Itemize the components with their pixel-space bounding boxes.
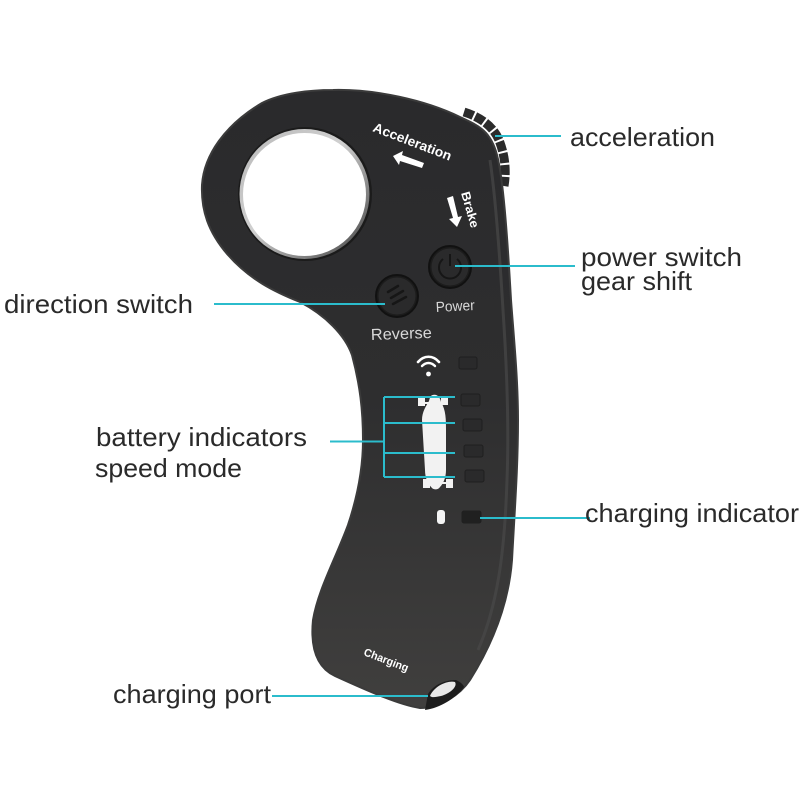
power button <box>429 246 475 316</box>
label: battery indicators and speed mode: battery indicators <box>96 422 307 452</box>
remote body <box>202 90 518 708</box>
label: power switch and gear shift: power switch <box>581 242 742 272</box>
brake marking: Brake <box>458 190 482 229</box>
icon: acceleration arrow <box>393 151 424 168</box>
icon: charging indicator mark <box>437 510 445 524</box>
label: battery indicators and speed mode: speed mode <box>95 453 242 483</box>
reverse button <box>371 275 432 344</box>
label: charging port: charging port <box>113 679 272 709</box>
label: battery indicators and speed mode <box>95 397 455 483</box>
charging marking: Charging <box>362 647 410 675</box>
power button: Power <box>435 298 475 316</box>
acceleration marking: Acceleration <box>371 120 454 164</box>
brake marking <box>447 190 482 229</box>
label: charging indicator: charging indicator <box>585 498 799 528</box>
finger hole <box>238 127 372 261</box>
label: power switch and gear shift <box>455 242 742 296</box>
label: power switch and gear shift: gear shift <box>581 266 693 296</box>
reverse button: Reverse <box>371 325 432 344</box>
label: acceleration: acceleration <box>570 122 715 152</box>
icon: skateboard <box>418 395 453 489</box>
acceleration thumb wheel <box>464 112 505 186</box>
label: direction switch: direction switch <box>4 289 193 319</box>
remote control device <box>202 90 518 710</box>
indicator lights <box>459 357 484 523</box>
icon: wifi <box>418 357 439 376</box>
body edge highlight <box>478 160 508 650</box>
charging port <box>425 680 464 710</box>
icon: brake arrow <box>447 196 462 227</box>
